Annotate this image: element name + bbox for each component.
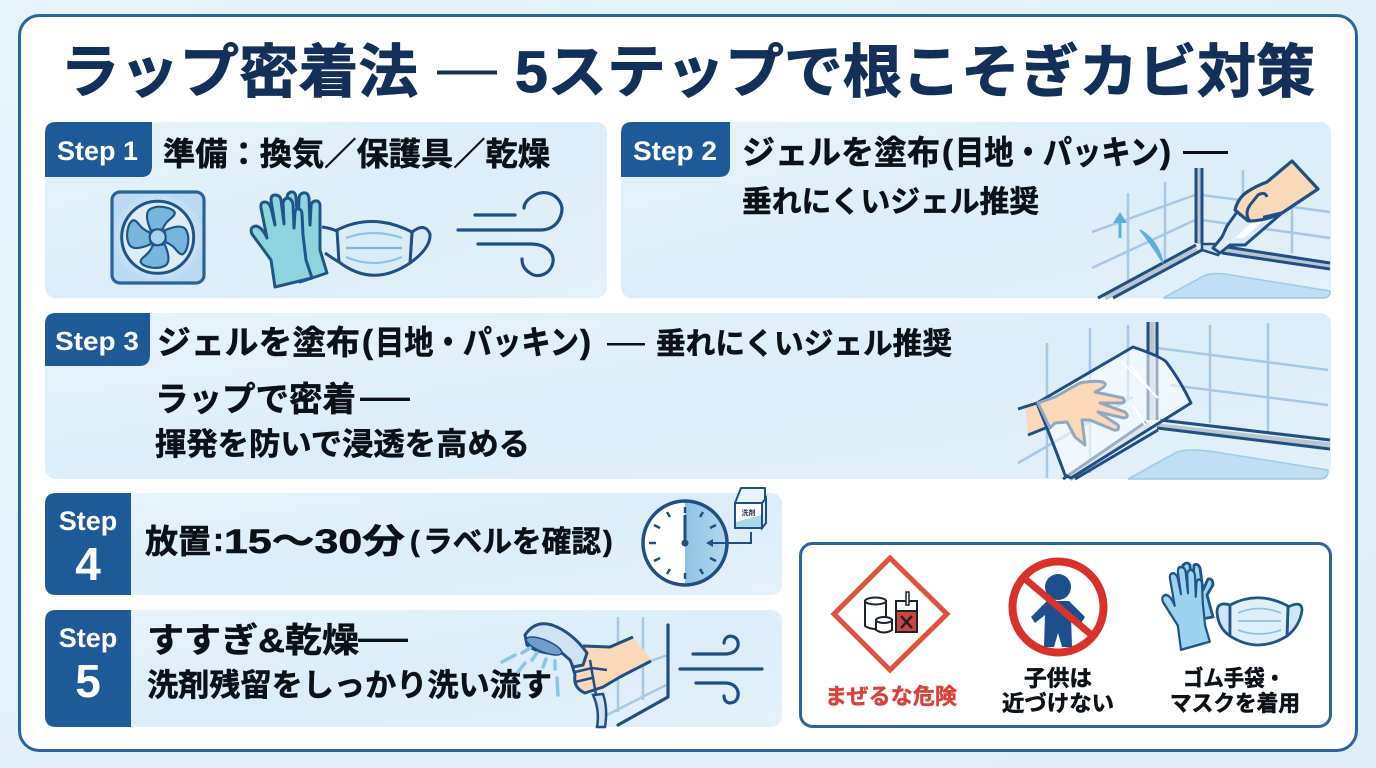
step 4 badge: 4: [75, 538, 101, 590]
step 4 text: ラベルを確認: [423, 526, 601, 559]
step 5 badge: Step: [59, 623, 117, 653]
icon: wind: [458, 193, 562, 276]
step 3 text: ): [580, 323, 591, 360]
title: [60, 34, 1315, 105]
step 5 text: すすぎ&乾燥: [147, 622, 359, 660]
illustration: wrap over hand: [1018, 322, 1330, 479]
icon: gloves and mask: [251, 192, 430, 287]
panel: step 4: [45, 488, 782, 595]
step 5 badge: 5: [75, 655, 101, 707]
step 4 badge: Step: [59, 506, 117, 536]
step 3 badge: Step 3: [55, 326, 139, 356]
step 5 text: [147, 608, 552, 703]
step 4 text: :: [213, 521, 224, 558]
step 2 text: 垂れにくいジェル推奨: [742, 186, 1039, 219]
step 3 text: ジェルを塗布: [157, 324, 360, 361]
step 5 text: 洗剤残留をしっかり洗い流す: [147, 668, 552, 703]
step 1 badge: [45, 122, 152, 177]
step 2 badge: Step 2: [633, 136, 717, 166]
step 3 text: 垂れにくいジェル推奨: [656, 328, 952, 361]
panel: step 1: [45, 122, 607, 298]
label: wear gloves and mask: [1170, 666, 1300, 716]
step 4 badge: [45, 493, 131, 595]
step 4 text: 15〜30分: [224, 523, 405, 561]
icon: glove and mask: [1162, 563, 1302, 650]
step 3 text: —: [607, 321, 645, 363]
step 5 badge: [45, 610, 131, 727]
step 4 text: ): [603, 526, 613, 558]
step 4 text: (: [410, 526, 420, 558]
title: 5ステップで根こそぎカビ対策: [515, 40, 1315, 105]
step 4 text: 放置: [145, 523, 211, 560]
label: keep children away: [1002, 666, 1114, 716]
icon: wind: [680, 636, 762, 703]
step 3 text: [155, 321, 952, 462]
illustration: applying gel with tube: [1092, 161, 1330, 298]
step 3 badge: [45, 313, 150, 366]
step 3 text: —: [360, 367, 410, 423]
icon: arrow from detergent to clock: [706, 532, 751, 547]
panel: step 3: [45, 313, 1331, 479]
step 2 text: [742, 123, 1228, 219]
icon: detergent box: [735, 488, 766, 528]
step 2 badge: [621, 122, 730, 177]
icon: no children: [1012, 562, 1104, 652]
step 2 text: —: [1183, 123, 1228, 174]
step 4 text: [145, 521, 613, 561]
label: wear gloves and mask: ゴム手袋・: [1183, 666, 1285, 691]
step 1 badge: Step 1: [57, 136, 138, 166]
icon: do not mix diamond: [834, 558, 947, 670]
step 2 text: (: [942, 133, 953, 170]
panel: warnings: [800, 544, 1330, 726]
panel: step 2: [621, 122, 1331, 298]
title: —: [437, 34, 497, 101]
step 2 text: ジェルを塗布: [742, 134, 940, 171]
step 3 text: 目地・パッキン: [375, 324, 579, 361]
icon: clock: [643, 501, 727, 585]
label: keep children away: 子供は: [1024, 666, 1092, 691]
step 1 heading: 準備：換気／保護具／乾燥: [163, 136, 550, 172]
label: do not mix: まぜるな危険: [825, 684, 957, 709]
label: wear gloves and mask: マスクを着用: [1170, 691, 1300, 716]
step 3 text: ラップで密着: [155, 381, 356, 419]
panel: step 5: [45, 608, 782, 727]
icon: detergent box: 洗剤: [742, 508, 756, 517]
step 2 text: 目地・パッキン: [955, 134, 1159, 171]
label: keep children away: 近づけない: [1002, 691, 1114, 716]
icon: ventilation fan: [112, 192, 204, 283]
step 3 text: 揮発を防いで浸透を高める: [155, 427, 530, 462]
illustration: shower rinsing: [502, 617, 668, 727]
step 5 text: —: [358, 608, 408, 664]
step 2 text: ): [1160, 133, 1171, 170]
step 3 text: (: [362, 323, 373, 360]
title: ラップ密着法: [60, 40, 418, 105]
